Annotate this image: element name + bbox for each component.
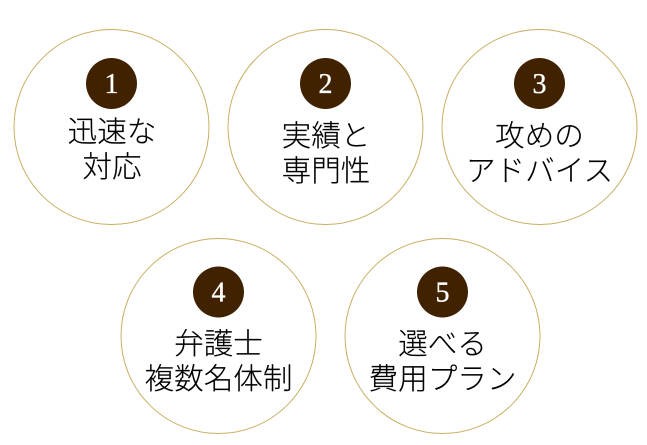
item 2: track record and expertise: [228, 30, 423, 224]
number badge 4: [193, 266, 244, 318]
number badge 2: [300, 58, 351, 109]
label 1: 迅速な: [68, 116, 156, 149]
label 1: [68, 116, 156, 184]
number badge 3: 3: [532, 69, 546, 100]
number badge 5: 5: [436, 278, 450, 308]
item 5: selectable fee plans: [345, 238, 540, 434]
label 2: 実績と: [282, 120, 370, 153]
number badge 5: [417, 266, 468, 318]
label 4: [145, 328, 292, 396]
number badge 1: [86, 58, 137, 109]
label 1: 対応: [82, 151, 142, 184]
label 3: [466, 120, 613, 188]
label 4: 弁護士: [174, 328, 263, 361]
circle outline 5: [345, 238, 540, 434]
circle outline 1: [14, 30, 209, 224]
circle outline 4: [121, 238, 316, 434]
label 3: 攻めの: [495, 120, 584, 153]
number badge 3: [514, 58, 565, 109]
label 2: [282, 120, 370, 188]
item 1: rapid response: [14, 30, 209, 224]
label 3: アドバイス: [466, 155, 613, 188]
number badge 4: 4: [212, 278, 226, 308]
label 4: 複数名体制: [145, 363, 292, 396]
label 2: 専門性: [282, 155, 370, 188]
item 3: aggressive advice: [442, 30, 637, 224]
item 4: multiple lawyers: [121, 238, 316, 434]
label 5: 選べる: [398, 328, 487, 361]
circle outline 2: [228, 30, 423, 224]
label 5: 費用プラン: [369, 363, 516, 396]
number badge 1: 1: [104, 69, 118, 100]
circle outline 3: [442, 30, 637, 224]
number badge 2: 2: [318, 69, 332, 100]
label 5: [369, 328, 516, 396]
